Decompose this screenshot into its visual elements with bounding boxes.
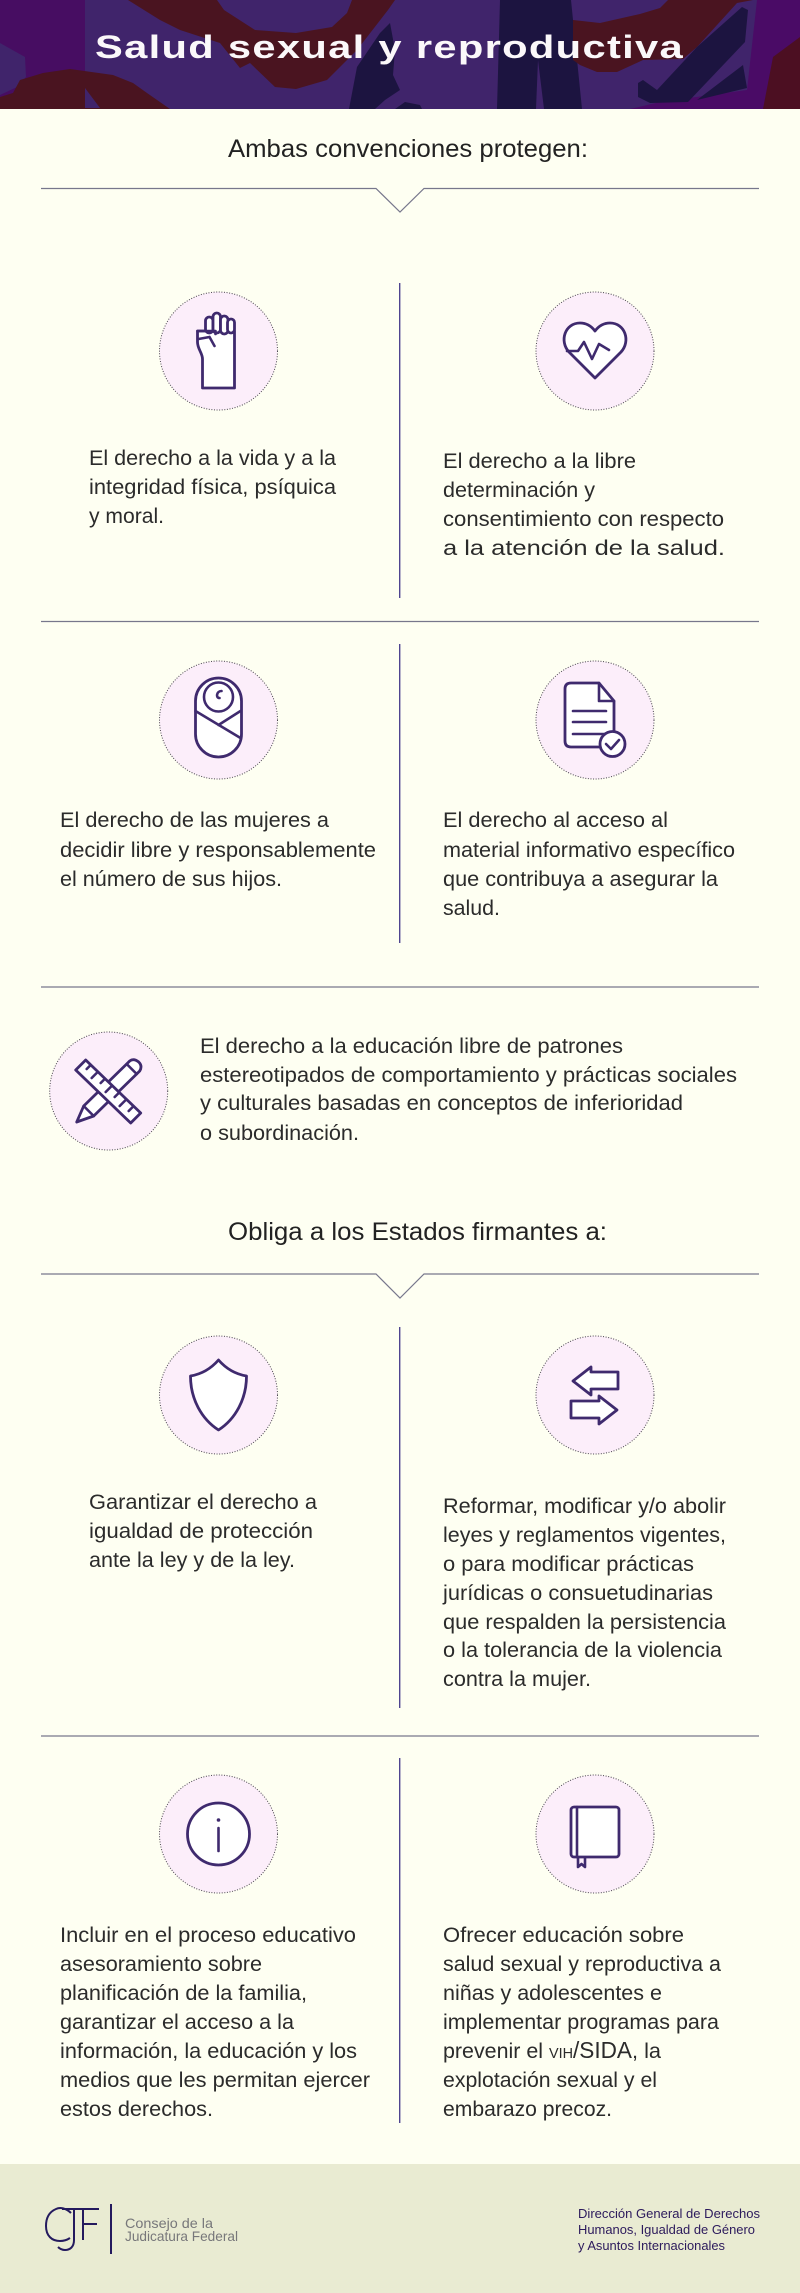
text: educación sexual: explotación sexual y el [443, 2069, 657, 2092]
text: proceso educativo: asesoramiento sobre [60, 1953, 262, 1976]
text: reformar leyes: o la tolerancia de la violencia [443, 1639, 722, 1662]
text: libre determinación: consentimiento con respecto [443, 508, 724, 531]
icon: pencil and ruler [76, 1060, 141, 1123]
text: educación sexual: niñas y adolescentes e [443, 1982, 662, 2005]
panel: libre determinación [443, 292, 725, 560]
panel: igualdad de protección [89, 1336, 317, 1572]
text: reformar leyes: Reformar, modificar y/o abolir [443, 1495, 726, 1518]
text: material informativo: que contribuya a asegurar la [443, 868, 718, 891]
text: Consejo de la Judicatura Federal: Consejo de la [125, 2215, 213, 2231]
text: material informativo: material informativo específico [443, 839, 735, 862]
text: reformar leyes: leyes y reglamentos vigentes, [443, 1524, 726, 1547]
text: reformar leyes: que respalden la persistencia [443, 1611, 726, 1634]
text: reformar leyes: contra la mujer. [443, 1668, 591, 1691]
text: Consejo de la Judicatura Federal: Judicatura Federal [125, 2228, 238, 2244]
text: proceso educativo: Incluir en el proceso educativo [60, 1924, 356, 1947]
text: número de hijos: El derecho de las mujeres a [60, 809, 329, 832]
text: derecho a la vida: El derecho a la vida y a la [89, 447, 336, 470]
icon: document with check [565, 683, 625, 756]
text: número de hijos: el número de sus hijos. [60, 868, 282, 891]
vertical divider row 3 [399, 1327, 401, 1708]
footer [0, 2164, 800, 2293]
text: educación sexual: , la [632, 2040, 661, 2063]
text: Dirección General: y Asuntos Internacionales [578, 2239, 725, 2253]
text: educación sexual: embarazo precoz. [443, 2098, 612, 2121]
icon: book with bookmark [571, 1807, 619, 1867]
text: igualdad de protección: igualdad de protección [89, 1520, 313, 1543]
panel: educación sexual [443, 1775, 721, 2121]
vertical divider row 1 [399, 283, 401, 598]
panel: reformar leyes [442, 1336, 726, 1691]
text: educación libre de patrones: y culturales basadas en conceptos de inferioridad [200, 1092, 683, 1115]
text: proceso educativo: planificación de la familia, [60, 1982, 307, 2005]
text: educación sexual: /SIDA [573, 2037, 633, 2063]
icon: exchange arrows [571, 1367, 618, 1424]
text: educación sexual: VIH [549, 2046, 573, 2062]
text: proceso educativo: garantizar el acceso a la [60, 2011, 294, 2034]
text: proceso educativo: información, la educación y los [60, 2040, 357, 2063]
text: educación libre de patrones: El derecho a la educación libre de patrones [200, 1035, 623, 1058]
panel: proceso educativo [60, 1775, 370, 2121]
text: proceso educativo: medios que les permitan ejercer [60, 2069, 370, 2092]
text: libre determinación: a la atención de la salud. [443, 537, 725, 560]
panel: material informativo [443, 661, 735, 920]
divider with down triangle [41, 1274, 759, 1298]
vertical divider row 4 [399, 1758, 401, 2123]
icon: heart with pulse [564, 323, 626, 378]
text: educación libre de patrones: o subordinación. [200, 1122, 359, 1145]
text: educación sexual: implementar programas para [443, 2011, 719, 2034]
text: derecho a la vida: integridad física, psíquica [89, 476, 336, 499]
text: libre determinación: El derecho a la libre [443, 450, 636, 473]
text: reformar leyes: jurídicas o consuetudinarias [442, 1582, 713, 1605]
vertical divider row 2 [399, 644, 401, 943]
text: libre determinación: determinación y [443, 479, 596, 502]
text: reformar leyes: o para modificar prácticas [443, 1553, 694, 1576]
icon: shield [190, 1360, 246, 1430]
header banner with abstract artwork [0, 0, 800, 109]
text: material informativo: El derecho al acceso al [443, 809, 668, 832]
title: Salud sexual y reproductiva [95, 29, 684, 65]
icon: swaddled baby [196, 678, 242, 757]
heading: Obliga a los Estados firmantes: Obliga a los Estados firmantes a: [228, 1218, 607, 1246]
text: derecho a la vida: y moral. [89, 505, 164, 528]
text: número de hijos: decidir libre y responsablemente [60, 839, 376, 862]
text: educación sexual: salud sexual y reproductiva a [443, 1953, 721, 1976]
heading: Ambas convenciones protegen: Ambas convenciones protegen: [228, 135, 588, 163]
panel: educación libre de patrones [50, 1032, 737, 1150]
text: proceso educativo: estos derechos. [60, 2098, 213, 2121]
text: igualdad de protección: ante la ley y de la ley. [89, 1549, 295, 1572]
icon: raised fist [198, 313, 234, 388]
text: educación sexual: Ofrecer educación sobre [443, 1924, 684, 1947]
text: educación libre de patrones: estereotipados de comportamiento y prácticas sociales [200, 1064, 737, 1087]
panel: derecho a la vida [89, 292, 336, 528]
text: Dirección General: Humanos, Igualdad de Género [578, 2223, 755, 2237]
text: igualdad de protección: Garantizar el derecho a [89, 1491, 317, 1514]
text: educación sexual: prevenir el [443, 2040, 543, 2063]
logo: CJF [46, 2204, 111, 2254]
divider with down triangle [41, 188, 759, 212]
icon: information [188, 1803, 250, 1865]
text: Dirección General: Dirección General de Derechos [578, 2207, 760, 2221]
text: material informativo: salud. [443, 897, 500, 920]
panel: número de hijos [60, 661, 376, 891]
